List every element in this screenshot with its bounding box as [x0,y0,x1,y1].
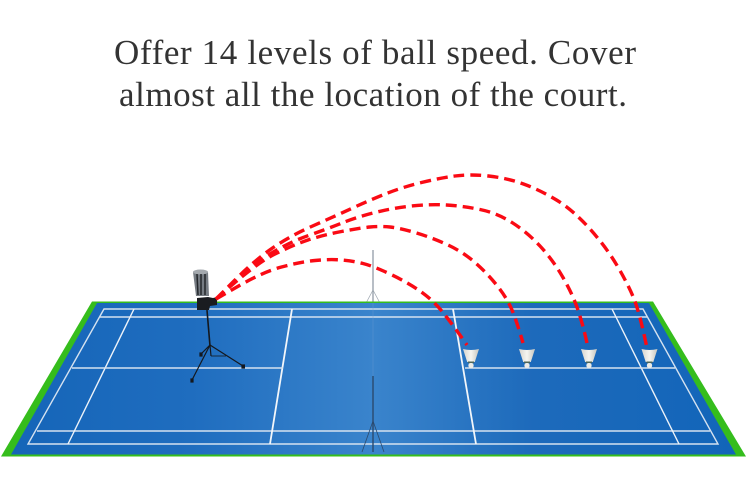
shuttlecock 2 [519,349,535,368]
shuttlecock 1 [463,349,479,368]
court lines [28,309,718,444]
court blue surface [11,303,736,454]
shuttlecock 3 [581,349,597,368]
shuttlecock 4 [642,349,658,368]
tripod [191,310,244,382]
badminton court [1,302,746,456]
net top pole behind court [365,250,381,305]
court green border [1,302,746,456]
title [114,33,636,114]
shuttlecocks [463,349,658,368]
ball hopper [193,272,209,296]
net lower pole and tripod [362,303,384,452]
title: almost all the location of the court. [119,75,627,114]
shuttle trajectories [216,175,647,348]
machine body [197,297,217,310]
title: Offer 14 levels of ball speed. Cover [114,33,636,72]
ball machine on tripod [191,270,244,382]
